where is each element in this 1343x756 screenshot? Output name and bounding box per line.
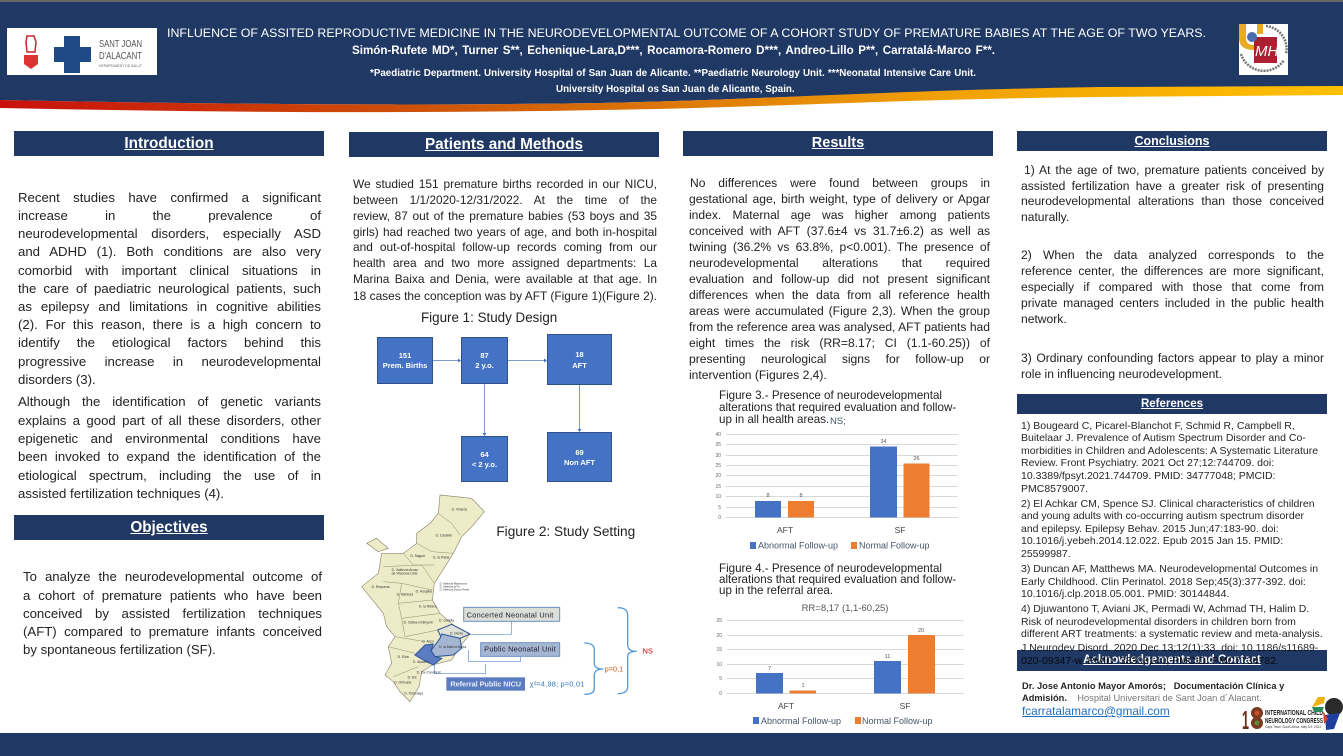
arrows (433, 358, 582, 436)
panel: introduction: identify the etiological factors behind this (18, 335, 321, 350)
box: 18 (548, 334, 612, 384)
heading: figure 1: Figure 1: Study Design (421, 310, 557, 325)
panel: results: presenting neurological signs for follow-up or (689, 352, 990, 366)
panel: introduction (14, 131, 324, 501)
panel: results: areas were accumulated (Figure 2,3). When the group (689, 304, 990, 318)
contact text: Dr. Jose Antonio Mayor Amorós; Documentación Clínica y (1022, 681, 1284, 691)
panel: introduction: Although the identification of genetic variants (18, 394, 321, 409)
chart: figure 3 bar chart: 8 (799, 493, 803, 499)
chart: figure 3 bar chart: 20 (715, 473, 721, 479)
email: fcarratalamarco@gmail.com (1022, 704, 1170, 718)
map labels: D. la Marina Baixa (439, 645, 466, 649)
heading: acknowledgements (1017, 650, 1327, 671)
chart: figure 3 bar chart: 35 (715, 442, 721, 448)
chart: figure 3 bar chart: 15 (715, 484, 721, 490)
bracket: NS: NS (643, 646, 653, 655)
panel: objectives: by spontaneous fertilization (SF). (23, 642, 216, 657)
box: 87: 2 y.o. (475, 361, 494, 370)
chart: figure 3 bar chart: 8 (766, 493, 770, 499)
affiliations: *Paediatric Department. University Hospital of San Juan de Alicante. **Paediatric Neurology Unit. ***Neonatal Intensive Care Unit. (370, 68, 976, 79)
figure 3 title: NS; (830, 416, 846, 427)
map labels: D. Gandia (439, 618, 454, 622)
logo: international child neurology congress: 1 (1242, 705, 1249, 735)
figure 4 title: Figure 4.- Presence of neurodevelopmental (719, 562, 942, 575)
label: public neonatal unit: Public Neonatal Unit (484, 645, 556, 654)
box: 69: 69 (575, 448, 584, 457)
chart: figure 4 bar chart: 20 (716, 633, 722, 639)
heading: results: Results (812, 135, 864, 151)
map labels: D. la Plana (433, 556, 449, 560)
panel: conclusions: 1) At the age of two, premature patients conceived by (1024, 163, 1324, 177)
panel: objectives (14, 515, 324, 657)
panel: results: from the reference area was analysed, AFT patients had (689, 320, 990, 334)
box: 87: 87 (480, 351, 489, 360)
map labels: D. València Arnau (392, 568, 418, 572)
panel: patients and methods: girls) had reached two years of age, and both in-hospital (353, 225, 657, 239)
chart: figure 4 bar chart: 0 (719, 691, 722, 697)
map labels: D. Requena (372, 585, 390, 589)
connector lines (434, 621, 520, 674)
map labels: D. Castelló (436, 534, 452, 538)
panel: references: Early Childhood. Clin Perinatol. 2018 Sep;45(3):377-392. doi: (1021, 576, 1306, 588)
region: referral (415, 644, 442, 665)
panel: objectives: (AFT) compared to premature infants conceived (23, 624, 322, 639)
panel: introduction: as epilepsy and limitations in cognitive abilities (18, 299, 321, 314)
heading: introduction: Introduction (124, 135, 214, 152)
panel: introduction: progressive increase in neurodevelopmental (18, 354, 321, 369)
map labels: D. Alacant (413, 660, 428, 664)
figure 4 title: alterations that required evaluation and follow- (719, 573, 956, 586)
map labels: D. València Doctor Peset (440, 588, 469, 592)
figure 4 subtitle: RR=8,17 (1,1-60,25) (802, 603, 888, 614)
chart: figure 3 bar chart: AFT (777, 525, 793, 535)
panel: references: 2) El Achkar CM, Spence SJ. Clinical characteristics of children (1021, 498, 1315, 510)
map labels: D. Alcoi (422, 640, 434, 644)
panel: references: 25599987. (1021, 548, 1071, 560)
bracket: p=0,1: p=0,1 (605, 665, 623, 674)
heading: references (1017, 394, 1327, 414)
panel: objectives: conceived by assisted fertilization techniques (23, 606, 322, 621)
chart: figure 4 bar chart (716, 562, 964, 726)
legend: Abnormal Follow-up (761, 716, 841, 726)
panel: conclusions (1017, 131, 1327, 381)
panel: conclusions: 2) When the data analyzed corresponds to the (1021, 248, 1324, 262)
chart: figure 3 bar chart: 25 (715, 463, 721, 469)
panel: patients and methods: Marina Baixa and Denia, were available at that age. In (353, 272, 657, 286)
logo: Sant Joan d'Alacant: SANT JOAN (99, 39, 142, 50)
panel: introduction: (2). For this reason, there is a high concern to (18, 317, 321, 332)
panel: references: morbidities in Children and Adolescents: A Systematic Literature (1021, 445, 1318, 457)
panel: references: PMC8579007. (1021, 483, 1088, 495)
chart: figure 4 bar chart: 15 (716, 647, 722, 653)
chart: figure 3 bar chart: 30 (715, 453, 721, 459)
map labels: D. Vinaròs (452, 508, 467, 512)
panel: introduction: Recent studies have confirmed a significant (18, 190, 321, 205)
box: 64: 64 (480, 450, 489, 459)
label: concerted neonatal unit: Concerted Neonatal Unit (467, 610, 553, 619)
panel: results: differences when the data from all reference health (689, 288, 990, 302)
logo: Sant Joan d'Alacant: D'ALACANT (99, 51, 142, 62)
panel: patients and methods: and out-of-hospital follow-up records coming from our (353, 240, 657, 254)
panel: patients and methods: health area and two more assigned departments: La (353, 256, 657, 270)
map labels: D. Xàtiva-Ontinyent (404, 621, 433, 625)
panel: patients and methods (349, 132, 659, 303)
panel: references: different ART treatments: a systematic review and meta-analysis. (1021, 628, 1323, 640)
panel: introduction: etiological spectrum, including the use of in (18, 468, 321, 483)
panel: results: neurodevelopmental alterations that required (689, 256, 990, 270)
panel: references: and young adults with co-occurring autism spectrum disorder (1021, 510, 1304, 522)
map labels: D. Orihuela (394, 681, 411, 685)
chart: figure 4 bar chart: 11 (885, 654, 890, 660)
heading: figure 2: Figure 2: Study Setting (496, 524, 635, 539)
chart: figure 4 bar chart: 20 (918, 628, 924, 634)
panel: results: No differences were found between groups in (690, 176, 990, 190)
overflowing reference text: 020-09347-w. PMID: 33308140; PMCID: PMC7734782. (1021, 655, 1279, 667)
map labels: D. Elda (398, 655, 409, 659)
region: public (431, 634, 462, 657)
panel: introduction: assisted fertilization techniques (4). (18, 486, 224, 501)
panel: results: eight times the risk (RR=8.17; CI (1.1-60.25)) of (689, 336, 990, 350)
label: referral public NICU (446, 677, 525, 691)
statistic: chi square: χ²=4,98; p=0,01 (530, 680, 584, 689)
panel: references: 3) Duncan AF, Matthews MA. Neurodevelopmental Outcomes in (1021, 563, 1318, 575)
panel: patients and methods: review, 87 out of the premature babies (53 boys and 35 (353, 209, 657, 223)
header banner (0, 0, 1343, 112)
panel: conclusions: especially if compared with those that come from (1021, 280, 1324, 294)
heading: introduction (14, 131, 324, 156)
logo: international child neurology congress: Cape Town, South Africa, May 5-9, 2024 (1265, 725, 1321, 729)
chart: figure 4 bar chart: 7 (768, 666, 771, 672)
authors: Simón-Rufete MD*, Turner S**, Echenique-Lara,D***, Rocamora-Romero D***, Andreo-Lillo P**, Carratalá-Marco F**. (352, 44, 995, 57)
chart: figure 4 bar chart: 10 (716, 662, 722, 668)
panel: introduction: explains a good part of all these disorders, other (18, 413, 321, 428)
chart: figure 4 bar chart: SF (900, 701, 910, 711)
panel: references: Review. Front Psychiatry. 2021 Oct 27;12:744709. doi: (1021, 457, 1274, 469)
contact text (1022, 681, 1284, 703)
panel: introduction: neurodevelopmental disorders, especially ASD (18, 226, 321, 241)
panel: conclusions: network. (1021, 312, 1067, 326)
panel: references: Buitelaar J. Prevalence of Autism Spectrum Disorder and Co- (1021, 432, 1306, 444)
panel: conclusions: reference center, the differences are more significant, (1021, 264, 1324, 278)
box: 151 (378, 338, 432, 384)
map labels: D. València la Fe (440, 585, 460, 589)
panel: introduction: epigenetic and environmental conditions have (18, 431, 321, 446)
chart: figure 4 bar chart: AFT (778, 701, 794, 711)
panel: objectives: a cohort of premature patients who have been (23, 588, 322, 603)
figure 4 title: up in the referral area. (719, 584, 833, 597)
panel: introduction: the care of paediatric neurological patients, such (18, 281, 321, 296)
affiliations: University Hospital os San Juan de Alicante, Spain. (556, 84, 795, 95)
panel: acknowledgements and contact (1017, 642, 1327, 718)
panel: references: 4) Djuwantono T, Aviani JK, Permadi W, Achmad TH, Halim D. (1021, 603, 1309, 615)
panel: references (1017, 394, 1327, 640)
heading: conclusions (1017, 131, 1327, 151)
panel: conclusions: private managed centers included in the public health (1021, 296, 1324, 310)
panel: results: intervention (Figures 2,4). (689, 368, 827, 382)
map labels: D. València Malvarrosa (440, 582, 467, 586)
logo: Universidad Miguel Hernandez: MH (1255, 43, 1278, 60)
legend: Abnormal Follow-up (758, 540, 838, 550)
panel: results: conceived with AFT (37.6±4 vs 31.7±6.2) as well as (689, 224, 990, 238)
panel: conclusions: role in influencing neurodevelopment. (1021, 367, 1222, 381)
bracket: p=0,1 (584, 643, 623, 694)
panel: results: twining (36.2% vs 63.8%, p<0.001). The presence of (689, 240, 990, 254)
chart: figure 3 bar chart: 0 (718, 515, 721, 521)
map of health departments (362, 495, 484, 702)
heading: acknowledgements: Acknowledgements and Contact (1083, 654, 1261, 666)
chart: figure 3 bar chart (715, 389, 958, 550)
panel: references: 1) Bougeard C, Picarel-Blanchot F, Schmid R, Campbell R, (1021, 420, 1295, 432)
bracket: NS (618, 608, 653, 694)
logo: international child neurology congress: INTERNATIONAL CHILD (1265, 710, 1323, 717)
overflowing reference text: J Neurodev Disord. 2020 Dec 13;12(1):33. doi: 10.1186/s11689- (1021, 642, 1318, 654)
chart: figure 4 bar chart: 1 (801, 683, 805, 689)
panel: conclusions: naturally. (1021, 210, 1069, 224)
box: 151: Prem. Births (383, 361, 427, 370)
legend (750, 540, 930, 550)
chart: figure 2 study setting map (361, 494, 653, 702)
map labels: D. Torrevieja (404, 692, 423, 696)
heading: objectives: Objectives (130, 519, 208, 536)
panel: conclusions: 3) Ordinary confounding factors appear to play a minor (1021, 351, 1324, 365)
map labels: D. Manises (397, 592, 414, 596)
panel: results (683, 131, 993, 382)
heading: results (683, 131, 993, 156)
logo: international child neurology congress (1242, 697, 1343, 735)
figure 3 title: up in all health areas. (719, 413, 829, 426)
panel: introduction: disorders (3). (18, 372, 96, 387)
panel: objectives: To analyze the neurodevelopmental outcome of (23, 569, 322, 584)
chart: figure 3 bar chart: 5 (718, 505, 721, 511)
footer band (0, 733, 1343, 756)
chart: figure 1 study design flow (377, 310, 612, 482)
box: 18: AFT (572, 361, 587, 370)
box: 64 (462, 436, 508, 482)
bars (756, 635, 935, 694)
map labels: D. Hospital (416, 590, 432, 594)
label: referral public NICU: Referral Public NICU (450, 679, 521, 688)
map labels: D. la Ribera (419, 605, 437, 609)
legend: Normal Follow-up (859, 540, 930, 550)
panel: results: evaluation and follow-up did not present significant (689, 272, 990, 286)
heading: patients and methods: Patients and Methods (425, 136, 583, 153)
box: 87 (462, 338, 508, 384)
panel: references: 10.3389/fpsyt.2021.744709. PMID: 34777048; PMCID: (1021, 470, 1276, 482)
figure 3 title: Figure 3.- Presence of neurodevelopmental (719, 389, 942, 402)
chart: figure 4 bar chart: 5 (719, 676, 722, 682)
panel: patients and methods: We studied 151 premature births recorded in our NICU, (353, 177, 657, 191)
panel: introduction: comorbid with important clinical situations in (18, 263, 321, 278)
title: INFLUENCE OF ASSITED REPRODUCTIVE MEDICINE IN THE NEURODEVELOPMENTAL OUTCOME OF A COHORT STUDY OF PREMATURE BABIES AT THE AGE OF TWO YEARS. (167, 26, 1206, 40)
overflowing reference text (1021, 642, 1318, 667)
chart: figure 3 bar chart: 34 (880, 439, 887, 445)
chart: figure 3 bar chart: SF (895, 525, 905, 535)
bars (755, 446, 930, 518)
box: 151: 151 (399, 351, 411, 360)
chart: figure 3 bar chart: 40 (715, 432, 721, 438)
figure 3 title: alterations that required evaluation and follow- (719, 401, 956, 414)
panel: conclusions: assisted fertilization have a greater risk of presenting (1021, 179, 1324, 193)
panel: references: Risk of neurodevelopmental disorders in children born from (1021, 616, 1296, 628)
chart: figure 4 bar chart: 25 (716, 618, 722, 624)
region: concerted (438, 624, 470, 638)
panel: introduction: increase in the prevalence of (18, 208, 321, 223)
contact text: Admisión. Hospital Universitari de Sant Joan d´Alacant. (1022, 693, 1262, 703)
legend (753, 716, 933, 726)
panel: references: 10.1016/j.yebeh.2014.12.022. Epub 2015 Jan 15. PMID: (1021, 535, 1283, 547)
chart: figure 3 bar chart: 26 (913, 456, 920, 462)
box: 69 (548, 432, 612, 482)
map labels: D. Elx-Crevillent (417, 670, 441, 674)
panel: introduction: and ADHD (1). Both conditions are also very (18, 244, 321, 259)
affiliations (370, 68, 976, 95)
map labels: D. Dénia (450, 632, 463, 636)
heading: references: References (1141, 398, 1203, 410)
figure 3 title (719, 389, 956, 427)
panel: patients and methods: between 1/1/2020-12/31/2022. At the time of the (353, 193, 657, 207)
panel: results: index. Maternal age was higher among patients (689, 208, 990, 222)
panel: results: gestational age, birth weight, type of delivery or Apgar (689, 192, 990, 206)
chart: figure 3 bar chart: 10 (715, 494, 721, 500)
map labels: D. Elx (408, 675, 417, 679)
panel: references: and epilepsy. Epilepsy Behav. 2015 Jun;47:183-90. doi: (1021, 523, 1279, 535)
panel: references: 10.1016/j.clp.2018.05.001. PMID: 30144844. (1021, 588, 1229, 600)
map labels: D. Sagunt (410, 554, 425, 558)
legend: Normal Follow-up (862, 716, 933, 726)
panel: patients and methods: 18 cases the conception was by AFT (Figure 1)(Figure 2). (353, 289, 657, 303)
box: 69: Non AFT (564, 458, 595, 467)
logo: Sant Joan d'Alacant: DEPARTAMENT DE SALUT (99, 64, 143, 68)
heading: objectives (14, 515, 324, 540)
map labels: de Vilanova-Llíria (392, 572, 417, 576)
heading: patients and methods (349, 132, 659, 157)
panel: conclusions: neurodevelopmental alterations than those conceived (1021, 194, 1324, 208)
map labels (372, 508, 469, 696)
label: concerted neonatal unit (464, 607, 560, 621)
logo: Sant Joan d'Alacant (7, 28, 157, 75)
heading: conclusions: Conclusions (1134, 134, 1210, 148)
figure 4 title (719, 562, 956, 597)
logo: Universidad Miguel Hernandez (1239, 24, 1288, 75)
label: public neonatal unit (481, 643, 560, 656)
panel: introduction: been invoked to expand the identification of the (18, 449, 321, 464)
box: 64: < 2 y.o. (472, 460, 497, 469)
box: 18: 18 (575, 350, 584, 359)
